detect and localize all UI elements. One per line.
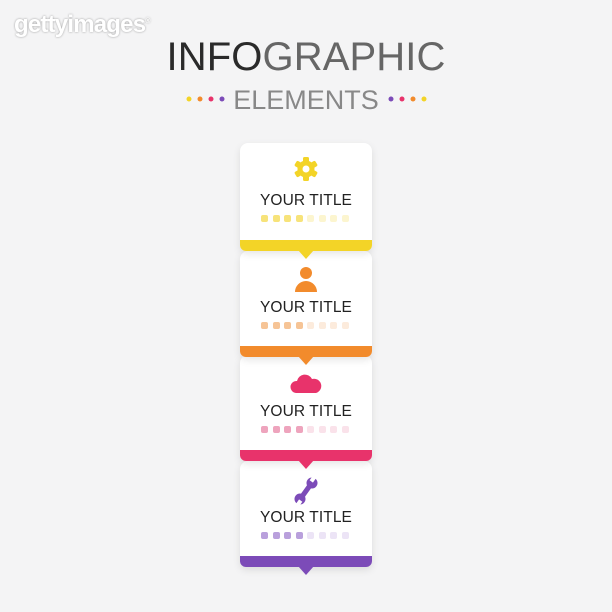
dots right — [388, 96, 426, 102]
text: title: YOUR TITLE — [260, 192, 352, 209]
panel: card 2 orange — [240, 251, 372, 357]
text: title: YOUR TITLE — [260, 403, 352, 420]
band — [240, 346, 372, 357]
icon: person — [295, 267, 317, 292]
band — [240, 556, 372, 567]
dots — [261, 426, 349, 433]
dots — [261, 532, 349, 539]
panel: card 3 pink — [240, 355, 372, 461]
subtitle text: ELEMENTS — [233, 85, 379, 115]
icon: gear — [294, 157, 318, 181]
dots — [261, 215, 349, 222]
dots — [261, 322, 349, 329]
panel: card 1 yellow — [240, 143, 372, 251]
watermark: gettyimages® — [14, 11, 150, 38]
icon: cloud — [290, 374, 322, 393]
dots left — [186, 96, 224, 102]
text: title: YOUR TITLE — [260, 299, 352, 316]
title: INFOGRAPHIC — [167, 35, 445, 79]
panel: card 4 purple — [240, 461, 372, 567]
text: title: YOUR TITLE — [260, 509, 352, 526]
band — [240, 450, 372, 461]
icon: wrench — [294, 478, 318, 504]
band — [240, 240, 372, 251]
subtitle with dots — [186, 85, 426, 115]
